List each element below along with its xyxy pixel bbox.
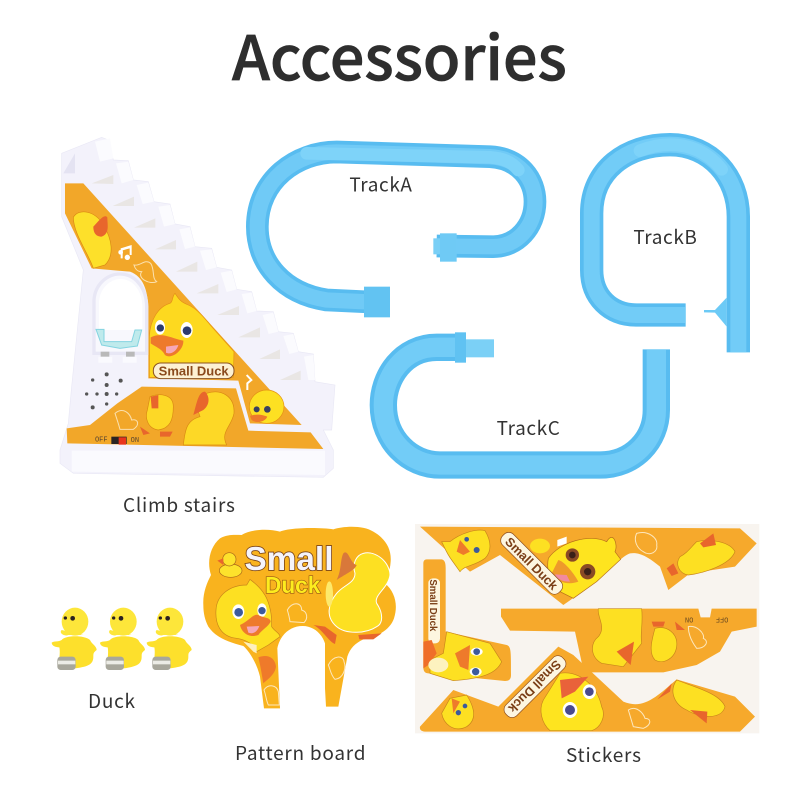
- pattern board: [203, 527, 396, 708]
- duck 3: [147, 608, 192, 670]
- track B tab: [704, 298, 727, 327]
- duck outline lower: [115, 411, 138, 429]
- rubber duck: [217, 553, 242, 577]
- top main duck: [548, 537, 621, 598]
- power switch: [95, 436, 139, 445]
- duck 1: [52, 608, 97, 670]
- orange upper panel: [65, 183, 302, 425]
- small duck label: Small Duck: [159, 363, 229, 378]
- title: Accessories: [232, 9, 567, 98]
- music note right: [247, 375, 251, 390]
- bottom right duck: [657, 680, 725, 723]
- left label: [427, 578, 440, 643]
- small duck head: [249, 390, 284, 423]
- top left duck: [442, 530, 490, 572]
- duck 2: [100, 608, 145, 670]
- top right duck: [667, 533, 735, 576]
- ducks: [52, 608, 192, 670]
- track C: [383, 332, 656, 465]
- orange wing: [258, 656, 276, 683]
- cream wing: [243, 642, 257, 653]
- speaker dots: [85, 372, 123, 409]
- music note: [118, 245, 132, 260]
- teal holder: [96, 329, 142, 348]
- arch opening: [94, 274, 147, 353]
- upper sleeping duck: [73, 212, 111, 268]
- board left duck: [216, 579, 280, 652]
- board right duck: [313, 552, 390, 644]
- bottom left duck: [442, 695, 474, 729]
- track B: [592, 145, 738, 352]
- middle duck big: [592, 609, 642, 667]
- left duck: [423, 632, 502, 681]
- track A connectors: [364, 287, 390, 317]
- track A: [257, 152, 535, 317]
- white outlines: [628, 533, 706, 728]
- lower duck big: [183, 392, 234, 445]
- stairs body: [60, 137, 335, 477]
- stickers sheet: [415, 524, 759, 733]
- label: pattern board: Pattern board: [235, 739, 366, 766]
- step shading: [63, 138, 315, 380]
- track B body: [592, 145, 738, 352]
- track C body: [383, 347, 656, 465]
- off on text: ON: [685, 614, 693, 622]
- off on text: [685, 614, 728, 622]
- duck outline: [134, 262, 157, 283]
- top small duck label: Small Duck: [502, 535, 561, 594]
- track C connector: [460, 339, 494, 357]
- middle duck small: [651, 622, 685, 662]
- track A body: [257, 152, 535, 302]
- left label: Small Duck: [427, 579, 438, 632]
- climb stairs toy: [60, 137, 335, 477]
- power switch: OFF: [95, 436, 108, 444]
- label: stickers: Stickers: [566, 741, 642, 768]
- bottom sticker: [420, 647, 755, 732]
- outline ducks: [264, 604, 345, 705]
- bottom small duck label: Small Duck: [505, 657, 564, 716]
- duck title: Duck: [265, 572, 321, 598]
- power switch: ON: [131, 437, 139, 445]
- board shape: [203, 527, 396, 708]
- label: climb stairs: Climb stairs: [123, 491, 236, 518]
- label: TrackC: TrackC: [497, 414, 560, 441]
- small title: Small: [245, 541, 333, 578]
- sheet background: [415, 524, 759, 733]
- lower duck left: [140, 395, 173, 437]
- left sticker: [423, 559, 511, 681]
- main duck: [149, 293, 234, 377]
- label: duck: Duck: [88, 687, 136, 714]
- music note: [557, 537, 567, 547]
- orange lower panel: [67, 387, 323, 449]
- rubber duck top: [530, 539, 550, 553]
- middle sticker: [501, 609, 757, 672]
- base plate: [72, 451, 325, 475]
- bottom main duck: [541, 673, 603, 731]
- off on text: OFF: [716, 614, 728, 622]
- label: TrackA: TrackA: [349, 171, 413, 198]
- label: TrackB: TrackB: [633, 223, 698, 250]
- top sticker: [420, 527, 757, 605]
